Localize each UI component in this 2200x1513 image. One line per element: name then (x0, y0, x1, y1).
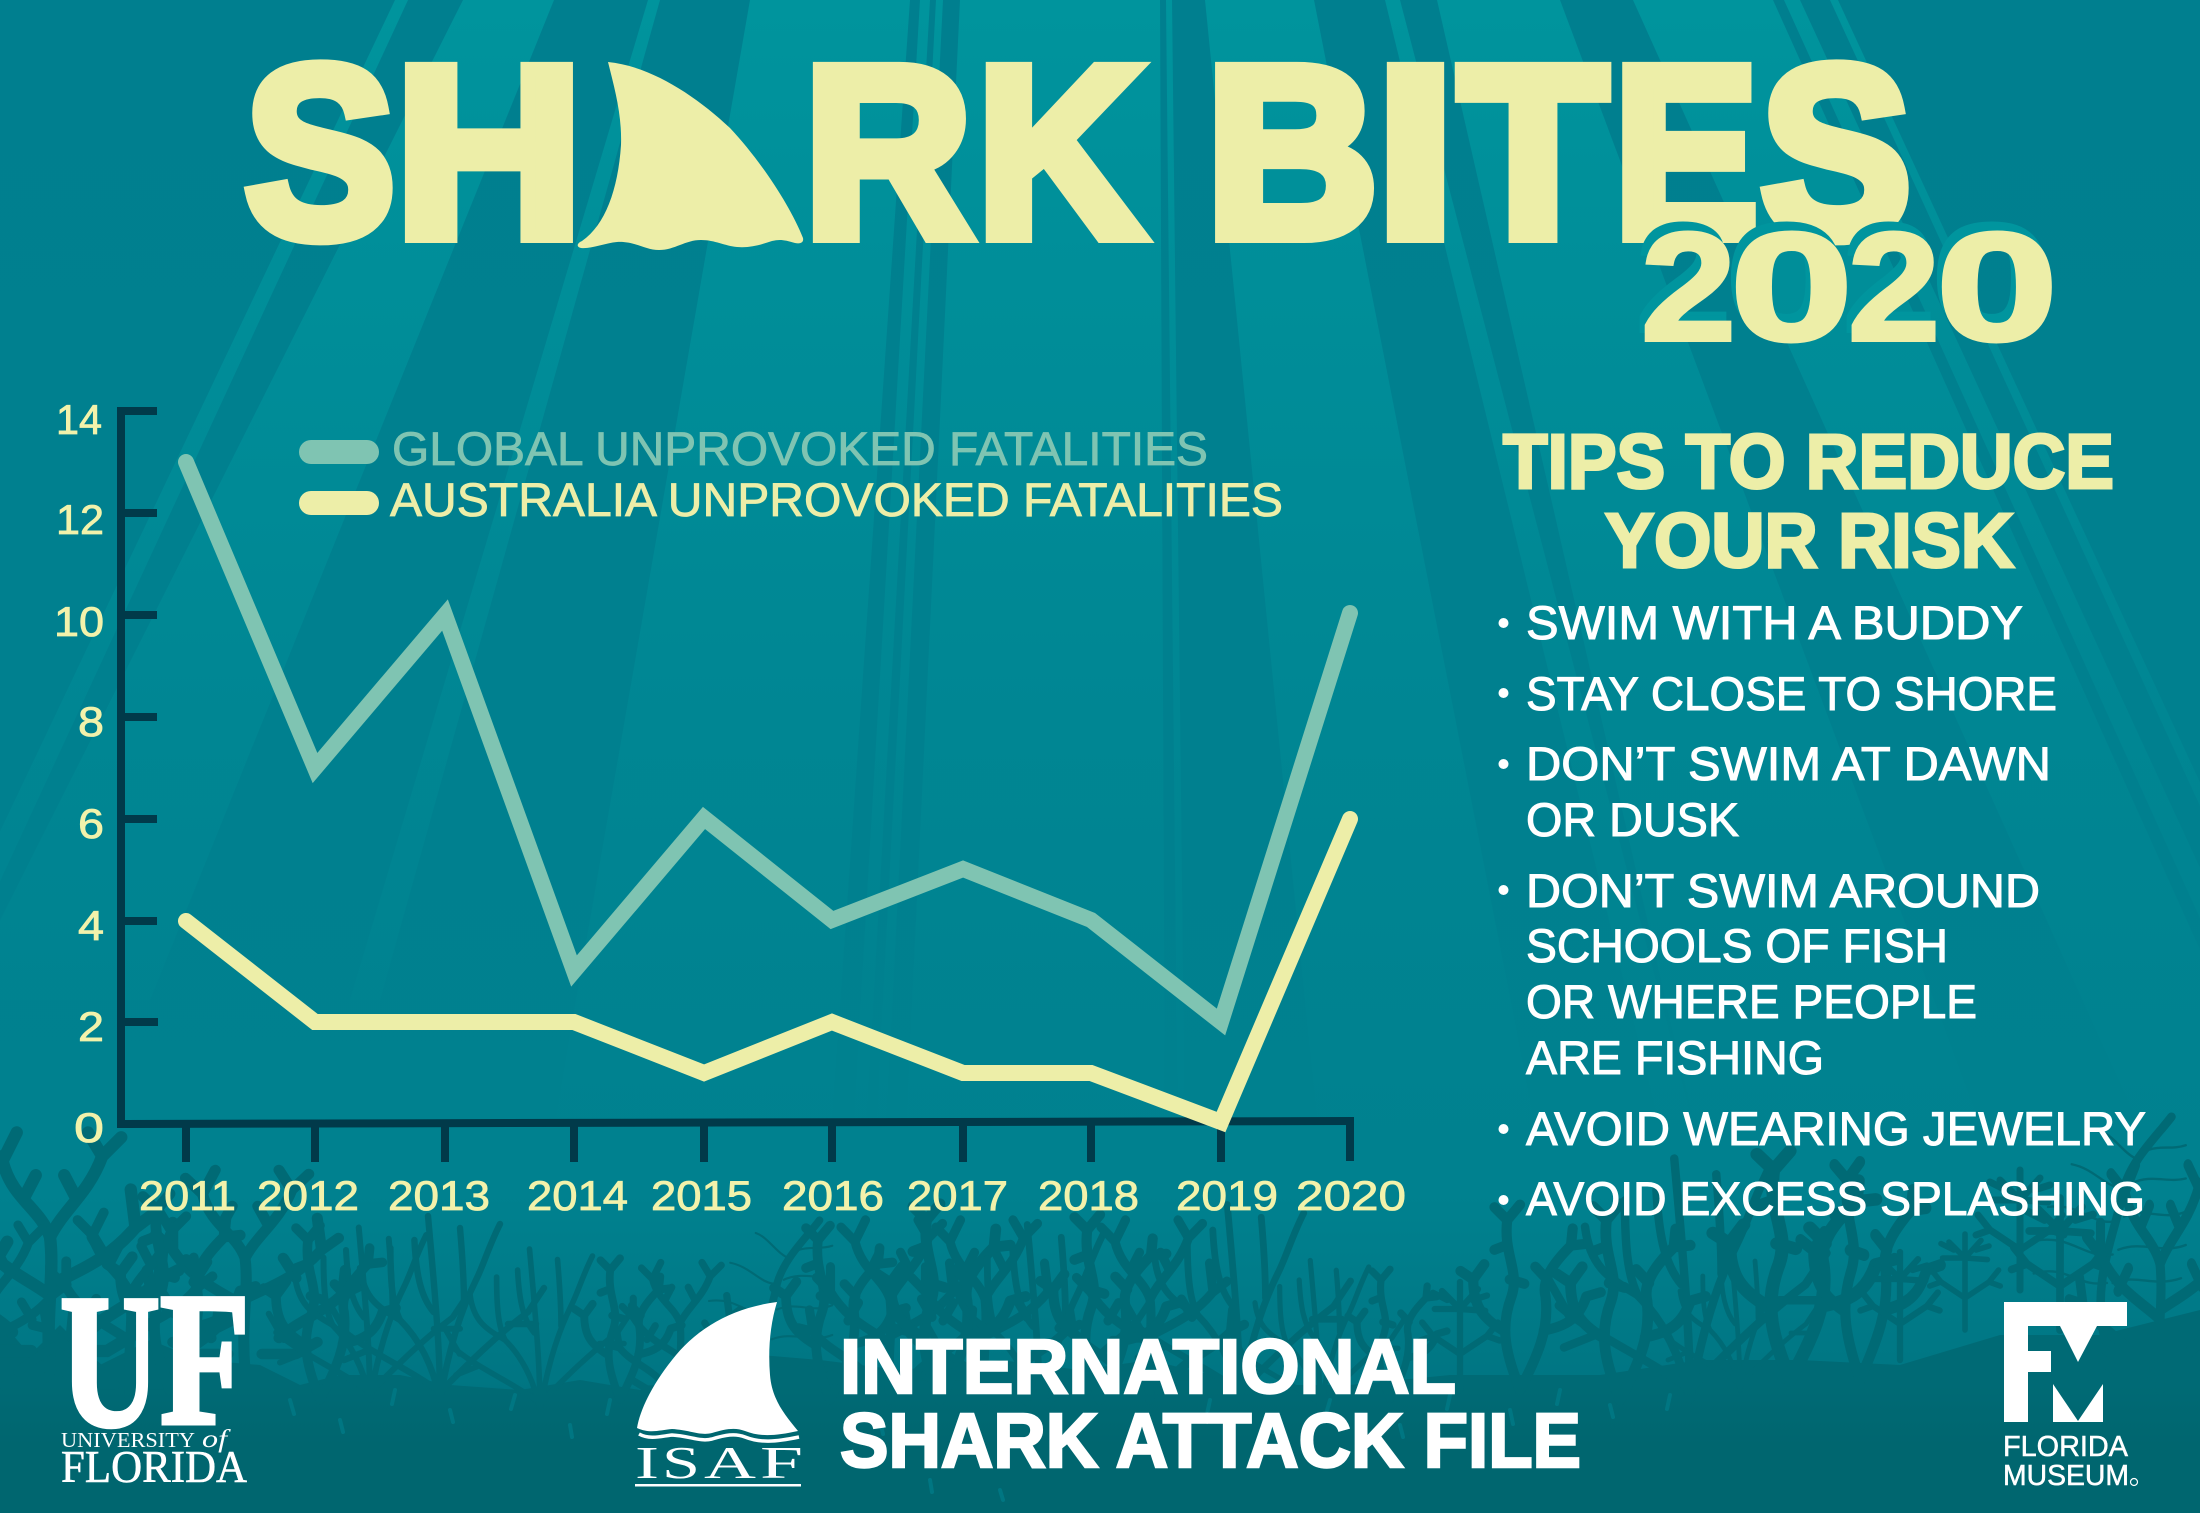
seabed flecks (290, 1390, 1670, 1500)
logo: Florida Museum: FLORIDA (2003, 1431, 2129, 1463)
tips list: OR DUSK (1526, 793, 1739, 846)
logo: ISAF shark fin: I (635, 1437, 659, 1488)
year 2020 subtitle: 0 (1725, 192, 1848, 364)
tips list (1526, 596, 2146, 1225)
tips heading (1503, 419, 2114, 584)
logo: University of Florida: UNIVERSITY (61, 1428, 195, 1452)
year 2020 subtitle: 0 (1931, 192, 2053, 364)
title: H (395, 17, 583, 288)
tips heading: YOUR RISK (1605, 498, 2014, 584)
logo: ISAF shark fin (635, 1302, 803, 1488)
year 2020 subtitle: 0 (1730, 201, 1853, 373)
tips list: DON’T SWIM AT DAWN (1526, 737, 2051, 790)
year 2020 subtitle: 0 (1936, 201, 2058, 373)
legend (299, 422, 1283, 526)
y axis labels: 14 (56, 396, 102, 443)
y axis labels: 10 (54, 598, 104, 645)
seabed fade (0, 1385, 2200, 1513)
panel: tips to reduce your risk (1498, 419, 2146, 1225)
x axis labels: 2020 (1296, 1172, 1406, 1219)
logo: University of Florida: FLORIDA (61, 1442, 247, 1492)
title: K (977, 17, 1143, 288)
year 2020 subtitle: 2 (1848, 201, 1940, 373)
title: S (245, 17, 395, 288)
y axis labels (54, 396, 104, 1151)
year 2020 subtitle (1636, 192, 2058, 373)
logo: University of Florida: F (160, 1255, 250, 1465)
title: R (804, 17, 972, 288)
logo: ISAF shark fin: A (704, 1437, 756, 1488)
global fatalities line (186, 462, 1350, 1022)
x axis labels: 2011 (139, 1172, 236, 1219)
logo: Florida Museum (2003, 1302, 2138, 1492)
title: B (1206, 17, 1378, 288)
title: E (1614, 17, 1758, 288)
y axis labels: 6 (78, 800, 104, 847)
x axis labels: 2016 (782, 1172, 884, 1219)
line chart (54, 396, 1406, 1219)
Australia fatalities line (186, 819, 1350, 1122)
x axis labels: 2018 (1038, 1172, 1139, 1219)
x axis labels: 2012 (257, 1172, 359, 1219)
logo: University of Florida: U (60, 1257, 160, 1467)
tips list: ARE FISHING (1526, 1031, 1824, 1084)
y axis labels: 2 (78, 1003, 104, 1050)
tips list: OR WHERE PEOPLE (1526, 975, 1977, 1028)
background light rays (0, 0, 2200, 1150)
year 2020 subtitle: 2 (1843, 192, 1935, 364)
logo: Florida Museum: MUSEUM (2003, 1460, 2129, 1492)
tips list: AVOID EXCESS SPLASHING (1526, 1172, 2145, 1225)
icon: shark fin letter A (578, 62, 803, 250)
tips heading: TIPS TO REDUCE (1503, 419, 2114, 505)
x axis labels: 2015 (651, 1172, 752, 1219)
tips bullets (1498, 618, 1508, 1205)
tips list: SCHOOLS OF FISH (1526, 919, 1948, 972)
title: S (1761, 17, 1911, 288)
y axis labels: 0 (74, 1104, 104, 1151)
tips list: DON’T SWIM AROUND (1526, 864, 2040, 917)
logo: ISAF shark fin: S (662, 1437, 700, 1488)
International Shark Attack File heading (840, 1324, 1581, 1484)
logo: University of Florida (60, 1255, 250, 1492)
title: T (1459, 17, 1607, 288)
x axis labels: 2019 (1176, 1172, 1278, 1219)
x axis labels: 2014 (527, 1172, 628, 1219)
y axis labels: 4 (78, 902, 104, 949)
International Shark Attack File heading: SHARK ATTACK FILE (840, 1398, 1581, 1484)
year 2020 subtitle: 2 (1641, 201, 1736, 373)
title (245, 17, 1911, 288)
logo: ISAF shark fin: F (760, 1437, 803, 1488)
x axis labels: 2013 (388, 1172, 490, 1219)
chart axes and ticks (118, 407, 1354, 1162)
tips list: SWIM WITH A BUDDY (1526, 596, 2023, 649)
x axis labels (139, 1172, 1406, 1219)
title: I (1376, 17, 1455, 288)
legend: AUSTRALIA UNPROVOKED FATALITIES (390, 473, 1283, 526)
legend: GLOBAL UNPROVOKED FATALITIES (392, 422, 1208, 475)
International Shark Attack File heading: INTERNATIONAL (840, 1324, 1456, 1410)
tips list: STAY CLOSE TO SHORE (1526, 667, 2057, 720)
y axis labels: 12 (56, 496, 104, 543)
year 2020 subtitle: 2 (1636, 192, 1731, 364)
tips list: AVOID WEARING JEWELRY (1526, 1102, 2146, 1155)
coral reef silhouette (0, 1117, 2200, 1450)
x axis labels: 2017 (907, 1172, 1008, 1219)
y axis labels: 8 (78, 698, 104, 745)
logo: University of Florida: of (202, 1426, 231, 1453)
